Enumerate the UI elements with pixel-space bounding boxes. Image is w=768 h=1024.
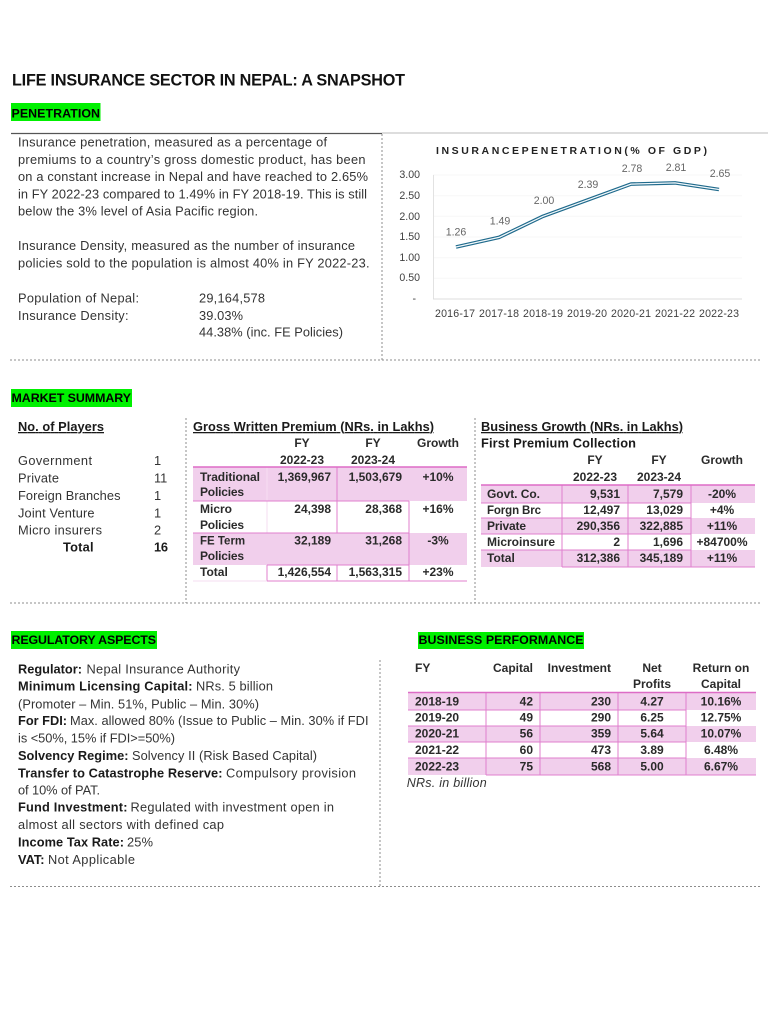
x axis labels: 2016-17 xyxy=(435,308,475,320)
text block: insurance density description: policies sold to the population is almost 40% in FY 2022-23. xyxy=(18,256,370,271)
row: micro policies: 24,398 xyxy=(294,502,331,516)
x axis labels: 2021-22 xyxy=(655,308,695,320)
row: foreign branch: +4% xyxy=(710,503,735,517)
row: foreign branch: Forgn Brc xyxy=(487,505,542,517)
row: total: +11% xyxy=(707,551,738,565)
panel: number of players: Foreign Branches xyxy=(18,488,120,503)
panel: number of players: No. of Players xyxy=(18,419,104,434)
row: 2018-19: 230 xyxy=(591,695,611,709)
row: 2021-22: 473 xyxy=(591,743,611,757)
column headers: 2023-24 xyxy=(637,470,681,484)
row: 2021-22: 60 xyxy=(520,743,533,757)
text block: regulatory aspects: For FDI: xyxy=(18,713,67,728)
column headers xyxy=(573,453,743,484)
text block: population and density figures xyxy=(18,291,343,340)
text block: insurance density description: Insurance Density, measured as the number of insurance xyxy=(18,238,355,253)
text block: regulatory aspects: Transfer to Catastrophe Reserve: xyxy=(18,766,222,781)
text block: population and density figures: 29,164,578 xyxy=(199,291,265,306)
heading: penetration: PENETRATION xyxy=(12,106,100,120)
text block: penetration description: premiums to a country’s gross domestic product, has been xyxy=(18,152,366,167)
text block: regulatory aspects: of 10% of PAT. xyxy=(18,782,100,797)
row: government company xyxy=(487,487,736,501)
row: microinsurance: 2 xyxy=(613,535,620,549)
row: foreign branch: 13,029 xyxy=(646,503,683,517)
x axis labels: 2019-20 xyxy=(567,308,607,320)
row: total: +23% xyxy=(422,565,454,579)
text block: population and density figures: 44.38% (inc. FE Policies) xyxy=(199,325,343,340)
table subheading: First Premium Collection xyxy=(481,436,636,450)
text block: penetration description: on a constant increase in Nepal and have reached to 2.65% xyxy=(18,169,368,184)
column headers: Profits xyxy=(633,677,671,691)
text block: regulatory aspects: almost all sectors with defined cap xyxy=(18,817,224,832)
row: total: 1,426,554 xyxy=(278,565,331,579)
row: private: +11% xyxy=(707,519,738,533)
panel: number of players: Micro insurers xyxy=(18,522,102,537)
column headers: Net xyxy=(642,661,662,675)
text block: regulatory aspects: (Promoter – Min. 51%, Public – Min. 30%) xyxy=(18,696,259,711)
row: 2022-23: 568 xyxy=(591,760,611,774)
column headers: Return on xyxy=(693,661,749,675)
row: 2022-23 xyxy=(415,760,738,774)
row: micro policies xyxy=(200,502,454,532)
row: private: 290,356 xyxy=(577,519,620,533)
row: 2021-22: 2021-22 xyxy=(415,743,459,757)
data line xyxy=(456,183,719,247)
row: government company: -20% xyxy=(708,487,736,501)
row: 2022-23: 6.67% xyxy=(704,760,738,774)
row: government company: 9,531 xyxy=(590,487,620,501)
row: 2018-19: 4.27 xyxy=(640,695,664,709)
y axis labels: 2.50 xyxy=(399,190,420,202)
row: 2020-21: 2020-21 xyxy=(415,727,459,741)
text block: penetration description: Insurance penetration, measured as a percentage of xyxy=(18,135,327,150)
column headers: Growth xyxy=(417,436,459,450)
row: 2020-21: 359 xyxy=(591,727,611,741)
row: traditional policies: 1,369,967 xyxy=(278,470,331,484)
row: microinsurance: 1,696 xyxy=(653,535,683,549)
text block: regulatory aspects: Regulated with investment open in xyxy=(130,800,334,815)
row: total: 345,189 xyxy=(640,551,683,565)
row: 2019-20 xyxy=(415,711,742,725)
column headers: FY xyxy=(294,436,310,450)
y axis labels: 3.00 xyxy=(399,169,420,181)
row: 2018-19: 10.16% xyxy=(701,695,742,709)
text block: penetration description: below the 3% level of Asia Pacific region. xyxy=(18,204,258,219)
row: total xyxy=(200,565,454,579)
text block: regulatory aspects: Income Tax Rate: xyxy=(18,835,124,850)
text block: regulatory aspects: Solvency Regime: xyxy=(18,748,128,763)
panel: business growth table xyxy=(481,419,755,567)
text block: regulatory aspects: Fund Investment: xyxy=(18,800,128,815)
panel: number of players: 2 xyxy=(154,522,161,537)
data labels: 1.49 xyxy=(490,216,510,228)
row: 2020-21: 5.64 xyxy=(640,727,664,741)
text block: regulatory aspects: Nepal Insurance Authority xyxy=(86,661,241,676)
row: micro policies: 28,368 xyxy=(365,502,402,516)
row: 2018-19: 42 xyxy=(520,695,533,709)
heading: market summary: MARKET SUMMARY xyxy=(12,391,132,405)
text block: regulatory aspects: Minimum Licensing Capital: xyxy=(18,679,192,694)
row: foreign branch xyxy=(487,503,735,517)
column headers: Capital xyxy=(701,677,741,691)
row: 2020-21: 56 xyxy=(520,727,533,741)
text block: regulatory aspects: VAT: xyxy=(18,852,44,867)
row: government company: Govt. Co. xyxy=(487,487,540,501)
column headers: 2023-24 xyxy=(351,453,395,467)
row: 2021-22: 3.89 xyxy=(640,743,664,757)
x axis labels xyxy=(435,308,739,320)
heading: regulatory aspects: REGULATORY ASPECTS xyxy=(12,633,156,647)
text block: penetration description: in FY 2022-23 compared to 1.49% in FY 2018-19. This is still xyxy=(18,186,367,201)
x axis labels: 2020-21 xyxy=(611,308,651,320)
y axis labels: 0.50 xyxy=(399,272,420,284)
column headers xyxy=(415,661,749,691)
row: micro policies: Micro xyxy=(200,502,232,516)
panel: gross written premium table xyxy=(193,419,467,581)
row: private: 322,885 xyxy=(640,519,683,533)
row: total: 312,386 xyxy=(577,551,620,565)
row: FE term policies: 32,189 xyxy=(294,534,331,548)
panel: number of players: Private xyxy=(18,470,59,485)
column headers: FY xyxy=(651,453,667,467)
row: private: Private xyxy=(487,519,526,533)
row: FE term policies: Policies xyxy=(200,549,244,563)
row: microinsurance xyxy=(487,535,748,549)
row: foreign branch: 12,497 xyxy=(583,503,620,517)
row: total: 1,563,315 xyxy=(349,565,402,579)
text block: regulatory aspects: is <50%, 15% if FDI>=50%) xyxy=(18,730,175,745)
panel: number of players: Total xyxy=(63,540,94,555)
panel: number of players: 1 xyxy=(154,488,161,503)
heading: business performance: BUSINESS PERFORMANCE xyxy=(418,633,584,647)
column headers: Investment xyxy=(548,661,611,675)
row: traditional policies: +10% xyxy=(422,470,454,484)
row: microinsurance: Microinsure xyxy=(487,535,555,549)
text block: population and density figures: Population of Nepal: xyxy=(18,291,139,306)
text block: regulatory aspects: Regulator: xyxy=(18,661,82,676)
column headers xyxy=(280,436,459,467)
text block: population and density figures: Insurance Density: xyxy=(18,308,128,323)
panel: business performance table xyxy=(407,661,756,790)
data labels xyxy=(446,162,730,238)
data labels: 2.39 xyxy=(578,179,598,191)
row: FE term policies xyxy=(200,534,449,563)
row: 2019-20: 6.25 xyxy=(640,711,664,725)
column headers: FY xyxy=(365,436,381,450)
column headers: FY xyxy=(587,453,603,467)
row: 2019-20: 12.75% xyxy=(701,711,742,725)
y axis labels: 1.00 xyxy=(399,252,420,264)
y axis labels: 1.50 xyxy=(399,231,420,243)
table note: NRs. in billion xyxy=(407,776,487,790)
panel: number of players: 1 xyxy=(154,453,161,468)
table heading: Business Growth (NRs. in Lakhs) xyxy=(481,419,683,434)
row: FE term policies: FE Term xyxy=(200,536,245,548)
table heading: Gross Written Premium (NRs. in Lakhs) xyxy=(193,419,434,434)
title: LIFE INSURANCE SECTOR IN NEPAL: A SNAPSHOT xyxy=(12,72,405,90)
column headers: Capital xyxy=(493,661,533,675)
row: 2019-20: 49 xyxy=(520,711,533,725)
column headers: FY xyxy=(415,661,430,675)
row: 2019-20: 290 xyxy=(591,711,611,725)
row: 2022-23: 5.00 xyxy=(640,760,664,774)
text block: penetration description xyxy=(18,135,368,219)
row: 2021-22 xyxy=(415,743,738,757)
row: microinsurance: +84700% xyxy=(696,535,748,549)
row: total xyxy=(487,551,738,565)
row: government company: 7,579 xyxy=(653,487,683,501)
row: 2020-21 xyxy=(415,727,742,741)
row: traditional policies: Policies xyxy=(200,485,244,499)
text block: regulatory aspects: Compulsory provision xyxy=(226,766,356,781)
data labels: 2.81 xyxy=(666,162,686,174)
x axis labels: 2017-18 xyxy=(479,308,519,320)
text block: regulatory aspects xyxy=(18,661,368,867)
row: FE term policies: -3% xyxy=(427,534,449,548)
text block: insurance density description xyxy=(18,238,370,271)
y axis labels: - xyxy=(412,293,416,305)
row: traditional policies xyxy=(200,470,454,499)
row: private xyxy=(487,519,738,533)
y axis labels: 2.00 xyxy=(399,211,420,223)
panel: number of players: Joint Venture xyxy=(18,506,94,521)
data labels: 2.00 xyxy=(534,195,554,207)
column headers: 2022-23 xyxy=(573,470,617,484)
row: micro policies: +16% xyxy=(422,502,454,516)
text block: regulatory aspects: 25% xyxy=(127,835,153,850)
text block: regulatory aspects: Not Applicable xyxy=(48,852,135,867)
x axis labels: 2018-19 xyxy=(523,308,563,320)
panel: number of players: Government xyxy=(18,453,92,468)
panel: number of players xyxy=(18,419,168,555)
row: 2021-22: 6.48% xyxy=(704,743,738,757)
chart title: INSURANCEPENETRATION(% OF GDP) xyxy=(436,145,707,157)
column headers: 2022-23 xyxy=(280,453,324,467)
panel: number of players: 16 xyxy=(154,540,168,555)
row: FE term policies: 31,268 xyxy=(365,534,402,548)
row: total: Total xyxy=(487,551,515,565)
row: 2019-20: 2019-20 xyxy=(415,711,459,725)
data labels: 2.78 xyxy=(622,163,642,175)
row: micro policies: Policies xyxy=(200,518,244,532)
panel: number of players: 11 xyxy=(154,470,167,485)
row: traditional policies: 1,503,679 xyxy=(349,470,402,484)
text block: regulatory aspects: NRs. 5 billion xyxy=(196,679,273,694)
line chart: insurance penetration xyxy=(399,145,742,320)
row: traditional policies: Traditional xyxy=(200,470,260,484)
row: 2018-19: 2018-19 xyxy=(415,695,459,709)
text block: regulatory aspects: Solvency II (Risk Based Capital) xyxy=(132,748,317,763)
row: total: Total xyxy=(200,565,228,579)
data labels: 2.65 xyxy=(710,168,730,180)
data labels: 1.26 xyxy=(446,226,466,238)
y axis labels xyxy=(399,169,420,305)
text block: population and density figures: 39.03% xyxy=(199,308,243,323)
x axis labels: 2022-23 xyxy=(699,308,739,320)
text block: regulatory aspects: Max. allowed 80% (Issue to Public – Min. 30% if FDI xyxy=(70,713,368,728)
row: 2022-23: 2022-23 xyxy=(415,760,459,774)
row: 2018-19 xyxy=(415,695,742,709)
row: 2022-23: 75 xyxy=(520,760,533,774)
panel: number of players: 1 xyxy=(154,506,161,521)
row: 2020-21: 10.07% xyxy=(701,727,742,741)
column headers: Growth xyxy=(701,453,743,467)
